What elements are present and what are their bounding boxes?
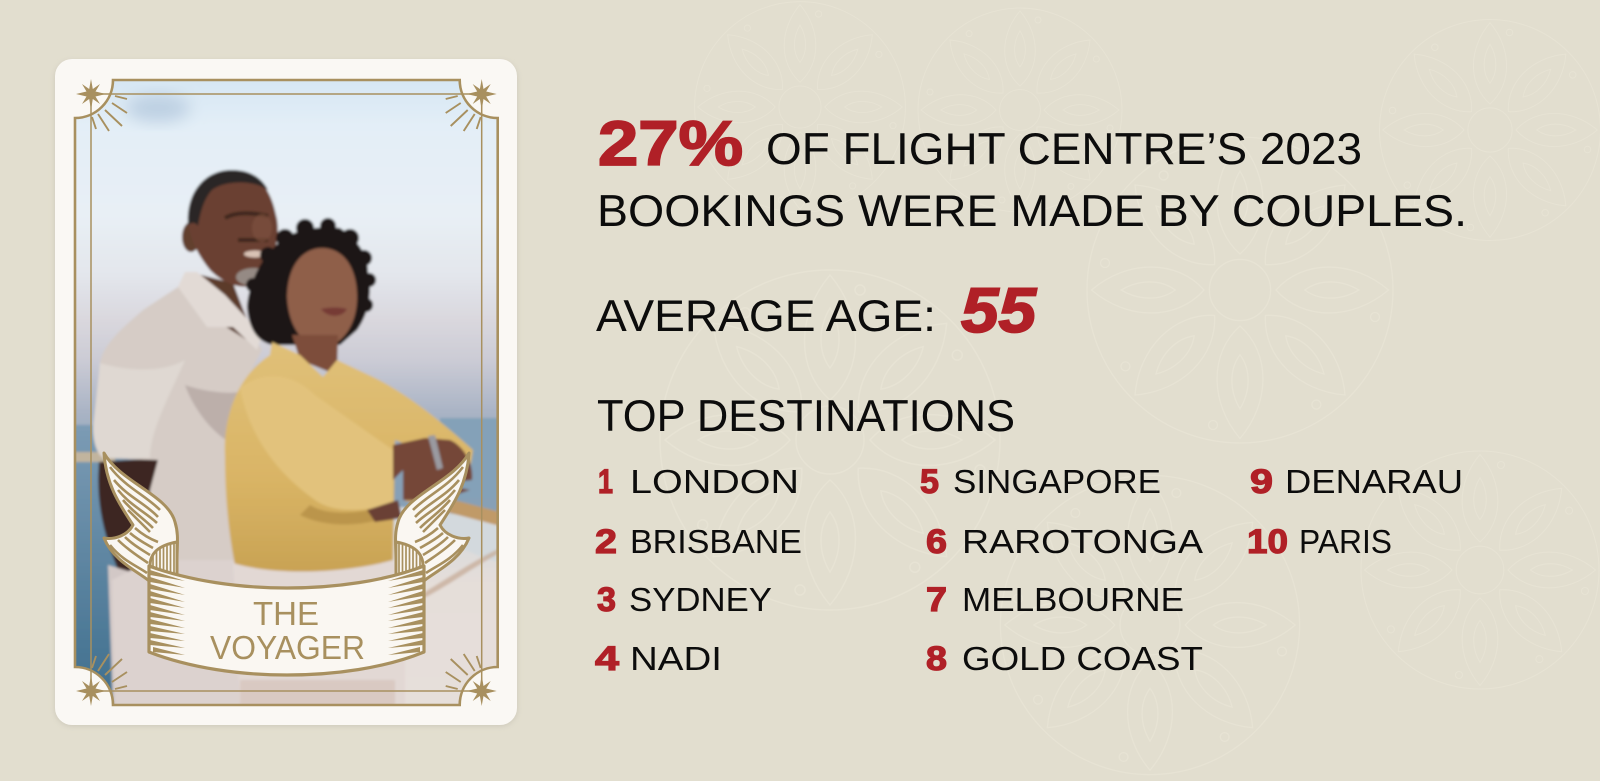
- list: destinations column 1: 1: [598, 463, 613, 501]
- list: destinations column 1: SYDNEY: [629, 581, 772, 618]
- banner label: [210, 595, 365, 666]
- heading: 27% of bookings statement: OF FLIGHT CENTRE’S 2023: [766, 125, 1362, 174]
- list: destinations column 2: SINGAPORE: [953, 463, 1161, 500]
- list: destinations column 2: GOLD COAST: [962, 640, 1203, 677]
- list: destinations column 1: BRISBANE: [630, 523, 802, 560]
- list: destinations column 1: 4: [595, 640, 619, 678]
- list: destinations column 3: 9: [1250, 463, 1273, 501]
- list: destinations column 1: NADI: [630, 640, 722, 677]
- banner label: THE: [253, 595, 319, 632]
- stat: average age: 55: [961, 276, 1037, 346]
- heading: 27% of bookings statement: BOOKINGS WERE MADE BY COUPLES.: [597, 187, 1467, 236]
- list: destinations column 2: RAROTONGA: [962, 523, 1203, 560]
- list: destinations column 3: [1247, 463, 1463, 561]
- banner: the voyager ribbon: [104, 453, 469, 675]
- list: destinations column 3: 10: [1247, 523, 1288, 561]
- stat: average age: AVERAGE AGE:: [596, 292, 936, 341]
- list: destinations column 2: 8: [926, 640, 947, 678]
- list: destinations column 3: DENARAU: [1285, 463, 1463, 500]
- heading: top destinations: TOP DESTINATIONS: [597, 392, 1015, 441]
- panel: voyager card: [55, 59, 1467, 726]
- list: destinations column 2: 6: [926, 523, 947, 561]
- list: destinations column 1: [595, 463, 802, 678]
- heading: 27% of bookings statement: 27%: [598, 109, 743, 179]
- list: destinations column 2: 7: [926, 581, 947, 619]
- list: destinations column 1: 3: [597, 581, 616, 619]
- frame: gold double border: [75, 80, 498, 705]
- stat: average age: [596, 276, 1037, 346]
- list: destinations column 2: MELBOURNE: [962, 581, 1184, 618]
- list: destinations column 2: [920, 463, 1203, 678]
- list: destinations column 1: 2: [595, 523, 617, 561]
- photo: couple on cruise deck: [70, 75, 502, 710]
- banner label: VOYAGER: [210, 629, 365, 666]
- list: destinations column 1: LONDON: [630, 463, 799, 500]
- list: destinations column 2: 5: [920, 463, 939, 501]
- list: destinations column 3: PARIS: [1299, 523, 1392, 560]
- icon: corner stars and rays: [76, 79, 497, 706]
- heading: 27% of bookings statement: [597, 109, 1467, 236]
